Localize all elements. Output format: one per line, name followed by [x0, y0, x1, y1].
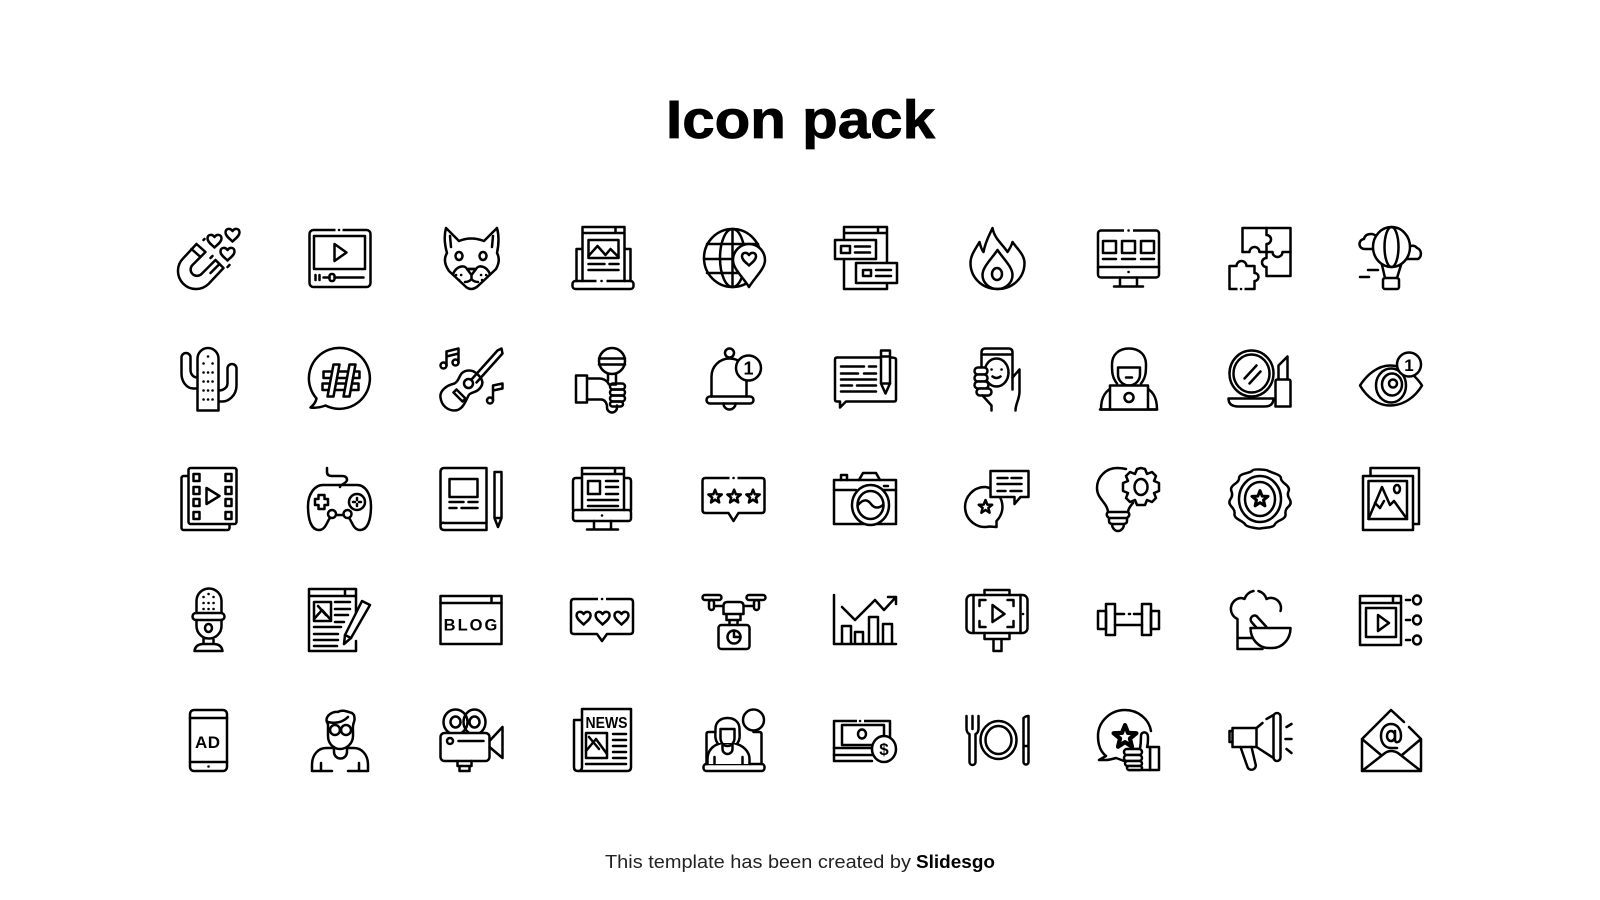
icon: bell notification: [706, 348, 761, 410]
icon: microphone: [192, 588, 224, 651]
icon: hot air balloon: [1359, 227, 1421, 289]
icon: hearts bubble: [571, 599, 633, 641]
icon: video player: [310, 230, 370, 287]
icon: star seal badge: [1229, 469, 1291, 529]
icon: video menu window: [1360, 596, 1421, 645]
icon: stacked photos: [1363, 468, 1419, 530]
icon: dog: [445, 228, 499, 289]
footer credit: Slidesgo: [916, 851, 995, 872]
icon: game controller: [308, 468, 371, 530]
icon: camera: [834, 473, 896, 525]
icon: cactus: [182, 348, 236, 410]
icon: plate and cutlery: [966, 716, 1028, 765]
icon: presenter with laptop: [704, 710, 764, 771]
icon: mirror and lipstick: [1228, 350, 1290, 406]
icon: film camera: [440, 710, 502, 771]
icon: hand holding microphone: [576, 348, 625, 412]
icon: magnet with hearts: [178, 229, 240, 289]
icon: puzzle: [1230, 228, 1290, 289]
icon: chef hat with mortar: [1231, 591, 1290, 649]
icon: phone ad: [190, 710, 227, 771]
icon: star review bubble: [702, 478, 764, 521]
icon: newspaper: NEWS: [586, 715, 628, 732]
icon: blog window: [440, 596, 502, 644]
icon: blog window: BLOG: [444, 616, 499, 634]
icon: flame: [970, 228, 1024, 289]
icon: hand holding phone: [974, 348, 1020, 410]
icon: money with coin: [834, 721, 896, 762]
icon: dumbbell: [1098, 604, 1159, 635]
icon: growth chart: [834, 595, 896, 644]
icon: article with pencil: [309, 589, 370, 651]
icon: bell notification: 1: [743, 358, 754, 378]
icon: guitar with notes: [440, 348, 502, 410]
icon: hooded woman with laptop: [1100, 348, 1157, 410]
icon: drone with camera: [702, 595, 766, 649]
footer credit: This template has been created by: [605, 851, 912, 872]
icon: desktop with news page: [573, 468, 631, 530]
icon: man with glasses: [312, 711, 368, 771]
icon: light bulb with gear: [1097, 468, 1159, 531]
icon: newspaper: [574, 709, 631, 771]
icon: chat bubbles with star: [965, 471, 1028, 527]
icon: text bubble with pencil: [835, 350, 896, 408]
icon: film strip: [182, 468, 236, 530]
icon grid: [178, 227, 1422, 771]
icon: money with coin: $: [879, 740, 889, 759]
icon: eye notification: [1360, 352, 1422, 406]
icon: hashtag bubble: [309, 348, 370, 409]
icon: monitor with tiles: [1098, 230, 1159, 286]
icon: laptop with page: [572, 227, 634, 289]
icon: globe with heart pin: [704, 229, 765, 287]
icon: star bubble with thumbs up: [1098, 710, 1159, 770]
title: Icon pack: [666, 90, 936, 150]
icon: phone ad: AD: [195, 733, 220, 752]
icon: open envelope with at sign: [1362, 710, 1421, 771]
icon: megaphone: [1230, 713, 1292, 770]
icon: book and pencil: [440, 468, 502, 530]
icon: eye notification: 1: [1404, 356, 1414, 375]
icon: selfie stick phone: [966, 590, 1028, 651]
icon: web layout cards: [835, 227, 897, 289]
